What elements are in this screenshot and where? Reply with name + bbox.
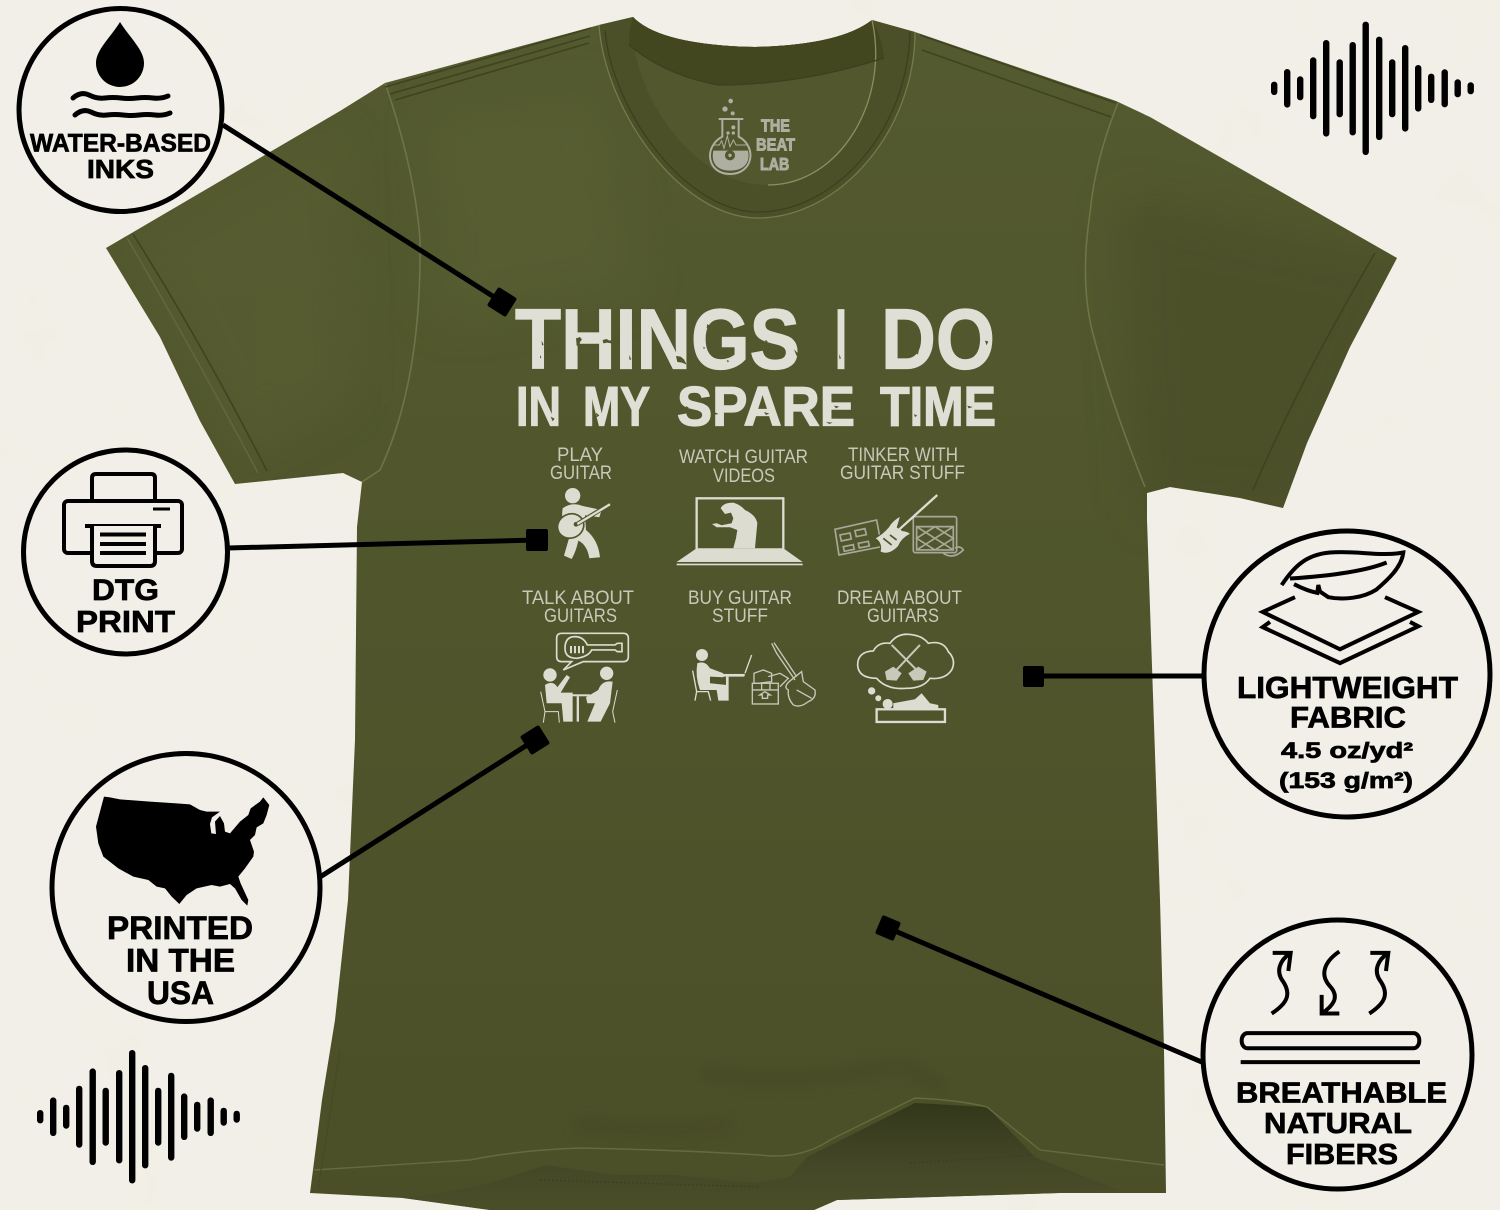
- distress marks: [540, 324, 988, 424]
- badge text: BREATHABLE: [1236, 1078, 1447, 1110]
- badge text: [107, 910, 253, 1011]
- caption: VIDEOS: [713, 466, 775, 487]
- connector: printed in the USA: [320, 725, 550, 877]
- badge text: [76, 574, 175, 639]
- neck interior: [632, 17, 876, 185]
- icon: water drop and waves: [73, 22, 170, 116]
- armhole seams and sleeve hems: [362, 83, 1145, 487]
- collar stitching: [599, 20, 915, 218]
- activity: buy guitar stuff: [688, 588, 815, 706]
- label text: THE: [761, 116, 790, 136]
- caption: PLAY: [557, 445, 603, 466]
- badge text: FABRIC: [1290, 702, 1406, 734]
- badge text: [1236, 1078, 1447, 1171]
- activity: dream about guitars: [837, 588, 962, 722]
- icon: feather over fabric layers: [1263, 552, 1418, 663]
- badge text: [30, 130, 211, 184]
- badge: printed in the USA: [52, 754, 320, 1022]
- caption: STUFF: [712, 606, 768, 627]
- badge text: FIBERS: [1286, 1139, 1398, 1171]
- print title: SPARE: [677, 374, 855, 438]
- caption: [522, 588, 634, 627]
- badge text: WATER-BASED: [30, 130, 211, 158]
- caption: BUY GUITAR: [688, 588, 792, 609]
- collar: [599, 17, 915, 218]
- badge text: PRINTED: [107, 910, 253, 946]
- connector: lightweight fabric: [1023, 666, 1205, 687]
- connector: breathable natural fibers: [875, 915, 1204, 1063]
- icon: sound wave top right: [1271, 22, 1474, 155]
- icon: sound wave bottom left: [37, 1050, 240, 1183]
- badge text: LIGHTWEIGHT: [1237, 670, 1458, 705]
- icon: sleeper dreaming of crossed guitars: [858, 634, 953, 722]
- back of shirt visible under hem: [403, 1103, 1119, 1210]
- print title: IN: [516, 374, 561, 438]
- badge text: PRINT: [76, 604, 175, 639]
- badge: DTG print: [24, 450, 228, 654]
- caption: GUITARS: [867, 606, 939, 627]
- back collar band: [629, 17, 884, 85]
- caption: [840, 445, 965, 484]
- badge text: NATURAL: [1264, 1108, 1412, 1140]
- caption: GUITAR: [550, 463, 612, 484]
- badge: lightweight fabric: [1204, 531, 1490, 817]
- icon: airflow arrows over fabric: [1241, 952, 1420, 1062]
- icon: laptop with guitarist: [677, 498, 803, 565]
- activity: watch guitar videos: [677, 447, 808, 565]
- label text: BEAT: [756, 135, 795, 155]
- connector: DTG print: [228, 529, 548, 551]
- caption: WATCH GUITAR: [679, 447, 808, 468]
- badge text: 4.5 oz/yd²: [1281, 738, 1413, 763]
- label text: LAB: [760, 154, 789, 174]
- print title: THINGS: [515, 292, 800, 388]
- badge text: (153 g/m²): [1279, 768, 1413, 793]
- badge: breathable natural fibers: [1203, 920, 1472, 1189]
- badge text: IN THE: [126, 942, 235, 978]
- caption: TINKER WITH: [848, 445, 958, 466]
- icon: USA map: [96, 797, 269, 906]
- icon: pedalboard, guitar and amp: [835, 495, 963, 556]
- activity: talk about guitars: [522, 588, 634, 723]
- connector: water-based inks: [223, 125, 517, 317]
- badge: water-based inks: [19, 8, 222, 212]
- hem stitching: [314, 1050, 1164, 1190]
- print title: MY: [583, 374, 650, 438]
- caption: TALK ABOUT: [522, 588, 634, 609]
- print title: I: [835, 292, 847, 388]
- print title: [515, 292, 996, 438]
- caption: [550, 445, 612, 484]
- caption: [688, 588, 792, 627]
- badge text: [1237, 670, 1458, 793]
- caption: [837, 588, 962, 627]
- badge text: USA: [147, 975, 214, 1011]
- caption: GUITARS: [544, 606, 617, 627]
- shirt print graphic: [515, 292, 996, 723]
- icon: guitarist: [554, 488, 610, 559]
- icon: printer: [64, 474, 182, 566]
- neck label logo: [710, 99, 795, 174]
- caption: DREAM ABOUT: [837, 588, 962, 609]
- flask icon: [710, 99, 750, 174]
- print title: DO: [881, 292, 995, 388]
- caption: [679, 447, 808, 487]
- activity: play guitar: [550, 445, 612, 559]
- hem folds: [575, 1065, 945, 1129]
- icon: two people talking: [541, 633, 628, 723]
- badge text: DTG: [92, 574, 159, 607]
- print title: TIME: [880, 374, 996, 438]
- fabric shading: [130, 90, 1420, 530]
- icon: online shopping person, boxes, guitar: [693, 643, 815, 706]
- caption: GUITAR STUFF: [840, 463, 965, 484]
- badge text: INKS: [87, 154, 154, 184]
- activity: tinker with guitar stuff: [835, 445, 965, 556]
- label text: [756, 116, 795, 174]
